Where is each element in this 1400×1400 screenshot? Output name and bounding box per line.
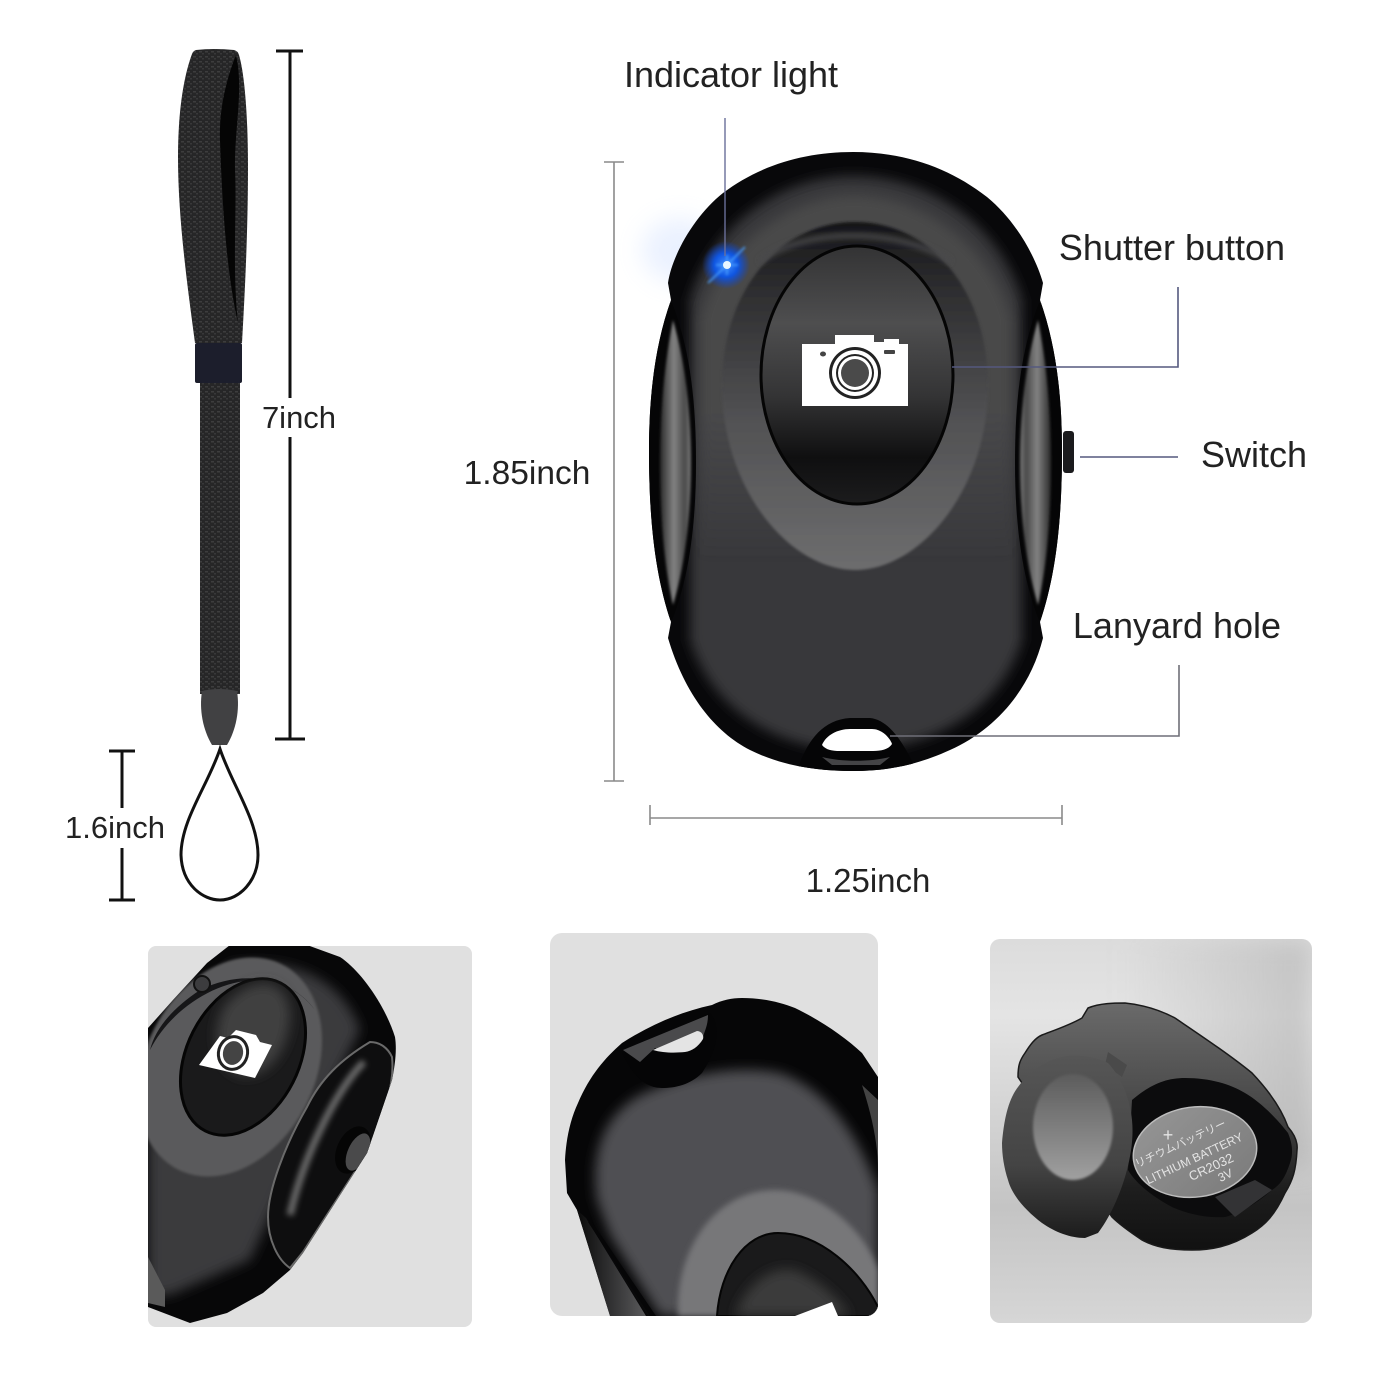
shutter button: [761, 246, 953, 504]
battery: リチウムバッテリー: [1133, 1117, 1228, 1171]
back shell: [1018, 1003, 1297, 1250]
button surround: [678, 1190, 878, 1316]
switch: [335, 1126, 371, 1174]
side grip: left: [649, 303, 696, 620]
side grip: right: [1015, 303, 1062, 620]
shutter button surround: [722, 222, 988, 570]
photo panel: lanyard angle: [550, 933, 878, 1320]
label: shutter button: [952, 227, 1285, 367]
dimension: 1.6 inch: [65, 751, 165, 900]
indicator light: [702, 241, 750, 289]
lanyard recess: [623, 1015, 708, 1088]
dimension: 1.85 inch: 1.85inch: [464, 455, 590, 492]
camera icon: [199, 1030, 272, 1078]
dimension: 7 inch: 7inch: [262, 400, 336, 435]
battery tab: [1215, 1180, 1272, 1217]
indicator glow halo: [642, 218, 718, 282]
main remote device: [640, 140, 1080, 780]
strap end cap: [201, 689, 238, 745]
battery: LITHIUM BATTERY: [1144, 1130, 1245, 1187]
lid tab: [1105, 1052, 1127, 1077]
string loop: [181, 749, 258, 900]
surround highlight: [760, 236, 950, 262]
indicator dot: [194, 976, 210, 992]
camera corner: [795, 1302, 838, 1316]
strap inner shadow: [220, 55, 239, 323]
strap loop: [178, 49, 248, 343]
side grip: [268, 1042, 393, 1268]
strap slider: [195, 343, 242, 383]
switch: [1063, 431, 1074, 473]
battery recess: [1128, 1078, 1292, 1217]
button: [717, 1233, 878, 1316]
surround: [148, 956, 323, 1178]
label: shutter button: Shutter button: [1059, 227, 1285, 268]
strap lower band: [200, 380, 240, 694]
camera icon: [802, 335, 908, 406]
device body: [148, 946, 396, 1323]
dimension: 7 inch: [262, 51, 336, 739]
label: indicator light: Indicator light: [624, 54, 838, 95]
label: lanyard hole: [890, 605, 1281, 736]
dimension: 1.6 inch: 1.6inch: [65, 810, 165, 845]
lid: [1002, 1056, 1133, 1238]
battery: 3V: [1216, 1166, 1235, 1185]
battery: [1132, 1106, 1258, 1198]
lid inner disc: [1033, 1074, 1113, 1180]
dimension: 1.25 inch: [650, 805, 1062, 899]
right grip: [862, 1085, 878, 1170]
label: switch: Switch: [1201, 434, 1307, 475]
dimension: 1.25 inch: 1.25inch: [806, 862, 930, 899]
wrist strap: [178, 49, 258, 900]
notch: [148, 1257, 165, 1307]
button: [179, 977, 307, 1137]
battery: CR2032: [1186, 1150, 1236, 1184]
photo panel: front angle: [148, 946, 472, 1327]
dimension: 1.85 inch: [464, 162, 624, 781]
lanyard hole: [797, 718, 917, 772]
photo panel: battery compartment: [990, 939, 1312, 1323]
label: lanyard hole: Lanyard hole: [1073, 605, 1281, 646]
device body: [550, 990, 878, 1320]
battery: +: [1163, 1125, 1173, 1145]
lower-left grip: [577, 1210, 646, 1316]
